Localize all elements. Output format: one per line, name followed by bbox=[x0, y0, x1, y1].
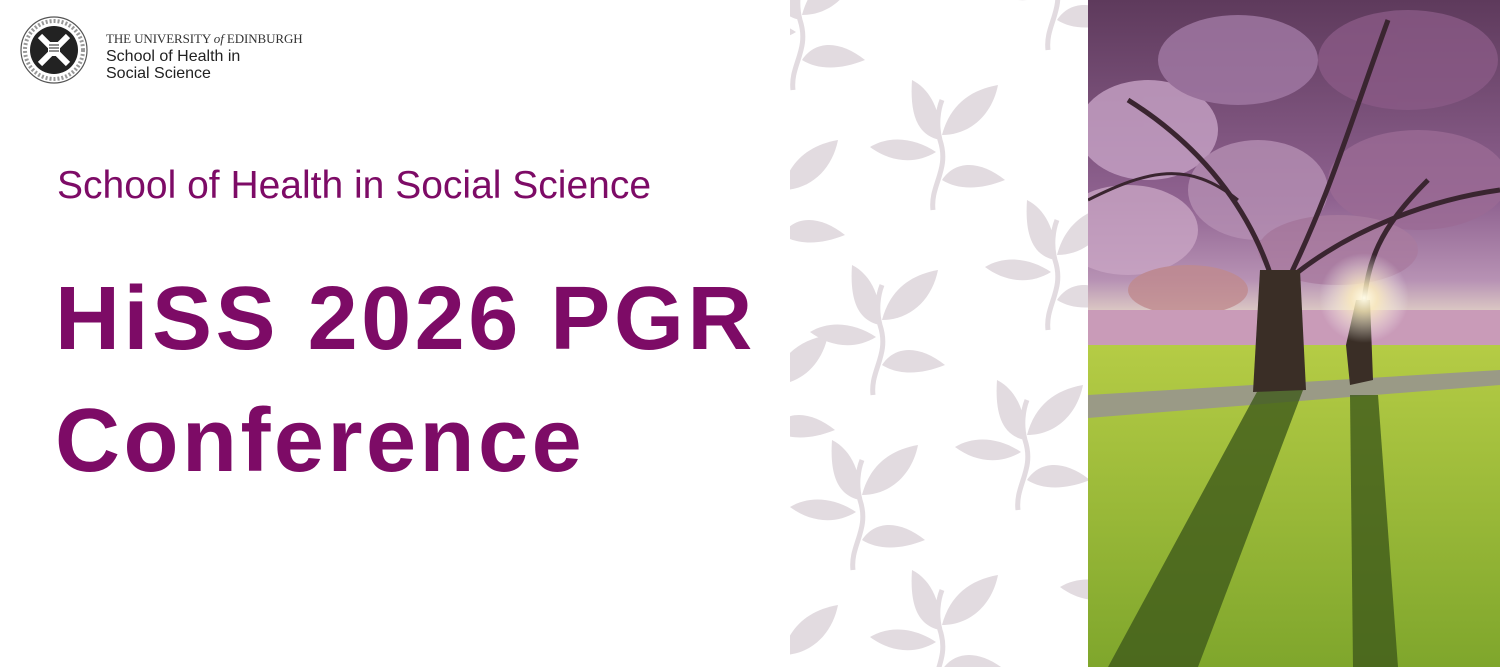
leaf pattern panel bbox=[790, 0, 1088, 667]
subtitle: School of Health in Social Science bbox=[57, 164, 651, 207]
trunk bbox=[1253, 270, 1306, 392]
branches bbox=[1088, 20, 1500, 310]
logo block bbox=[20, 16, 303, 84]
grass bbox=[1088, 345, 1500, 667]
canopy clusters bbox=[1058, 10, 1500, 315]
main title: HiSS 2026 PGR bbox=[55, 269, 756, 369]
distant trees row bbox=[1088, 310, 1500, 346]
logo text: Social Science bbox=[106, 65, 211, 82]
shadows bbox=[1108, 390, 1303, 667]
path bbox=[1088, 370, 1500, 418]
icon: university crest bbox=[20, 16, 88, 84]
main title: Conference bbox=[55, 391, 585, 491]
logo text bbox=[106, 31, 303, 82]
sun glow bbox=[1319, 253, 1409, 343]
main title bbox=[55, 269, 756, 491]
logo text: School of Health in bbox=[106, 48, 240, 65]
photo: cherry blossom tree in park bbox=[1088, 0, 1500, 667]
leaf sprigs bbox=[700, 0, 1195, 667]
logo text: THE UNIVERSITY of EDINBURGH bbox=[106, 31, 303, 46]
